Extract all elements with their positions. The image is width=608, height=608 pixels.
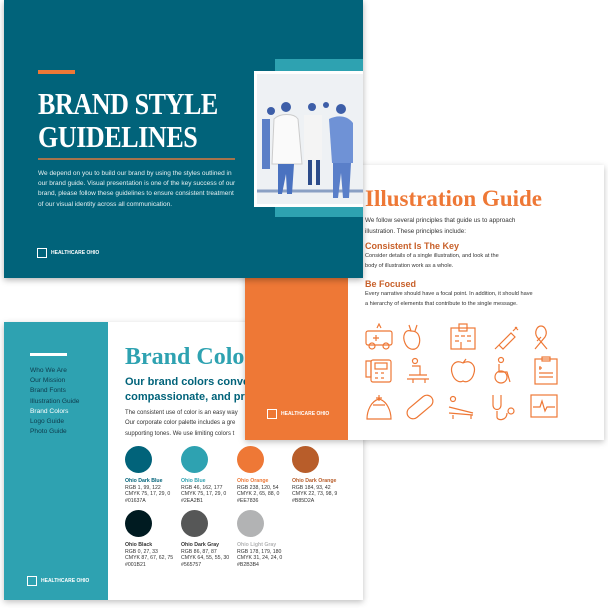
subheading [125, 376, 258, 403]
orange column [245, 165, 348, 440]
logo [267, 409, 330, 419]
swatch: dark gray: CMYK 64, 55, 55, 30 [181, 555, 229, 561]
nav menu: Logo Guide [30, 418, 64, 425]
title [38, 86, 218, 154]
swatch: blue: CMYK 75, 17, 29, 0 [181, 491, 226, 497]
section: focused: Be Focused [365, 279, 416, 289]
body text: Our corporate color palette includes a gre [125, 420, 235, 426]
section: consistent [365, 241, 499, 268]
swatch: dark orange: #B85D2A [292, 498, 314, 504]
icon grid [365, 323, 558, 420]
swatch: dark orange: RGB 184, 93, 42 [292, 485, 331, 491]
swatch: dark orange [292, 446, 337, 504]
nav menu: Brand Colors [30, 408, 68, 415]
logo: HEALTHCARE OHIO [41, 578, 89, 584]
swatch: orange: Ohio Orange [237, 478, 268, 484]
intro text [365, 217, 515, 234]
swatch: blue: RGB 46, 162, 177 [181, 485, 223, 491]
logo [37, 248, 100, 258]
row 3 [367, 395, 391, 419]
swatch: dark blue: RGB 1, 99, 122 [125, 485, 161, 491]
section: focused: Every narrative should have a focal point. In addition, it should have [365, 291, 533, 297]
description: brand, please follow these guidelines to ensure consistent treatment [38, 190, 234, 197]
swatch: dark blue: CMYK 75, 17, 29, 0 [125, 491, 170, 497]
section: focused: a hierarchy of elements that contribute to the single message. [365, 300, 518, 306]
description: our brand guide. Visual presentation is one of the key success of our [38, 180, 235, 187]
intro text: illustration. These principles include: [365, 228, 466, 234]
description: We depend on you to build our brand by using the styles outlined in [38, 170, 232, 177]
heading: Brand Colors [125, 344, 264, 370]
logo: HEALTHCARE OHIO [281, 411, 329, 417]
swatch: blue: Ohio Blue [181, 478, 206, 484]
row 1 [366, 324, 392, 349]
swatch: dark blue: Ohio Dark Blue [125, 478, 162, 484]
nav menu: Brand Fonts [30, 387, 66, 394]
swatch: dark gray: Ohio Dark Gray [181, 542, 219, 548]
nav menu: Photo Guide [30, 428, 67, 435]
swatch: blue: #2EA2B1 [181, 498, 203, 504]
logo [27, 576, 90, 586]
swatch: dark blue [125, 446, 170, 504]
swatch: black: Ohio Black [125, 542, 152, 548]
swatch: dark gray: #565757 [181, 562, 201, 568]
title: GUIDELINES [38, 119, 197, 154]
swatch: dark gray: RGB 86, 87, 87 [181, 549, 217, 555]
description: of our visual identity across all communication. [38, 201, 172, 208]
nav menu: Illustration Guide [30, 398, 79, 405]
swatch: black: RGB 0, 27, 33 [125, 549, 158, 555]
divider [38, 158, 235, 160]
swatch: dark orange: Ohio Dark Orange [292, 478, 336, 484]
body text: supporting tones. We use limiting colors t [125, 431, 234, 437]
section: consistent: Consistent Is The Key [365, 241, 459, 251]
logo: HEALTHCARE OHIO [51, 250, 99, 256]
swatch: black [125, 510, 173, 568]
description [38, 170, 236, 208]
nav menu [30, 367, 80, 435]
row 2 [366, 360, 391, 382]
section: consistent: body of illustration work as a whole. [365, 262, 453, 268]
subheading: compassionate, and prog [125, 391, 258, 403]
orange accent bar [38, 70, 75, 74]
nav menu: Our Mission [30, 377, 65, 384]
swatch: light gray: #B2B3B4 [237, 562, 259, 568]
body text: The consistent use of color is an easy way [125, 410, 238, 416]
swatch: black: #001B21 [125, 562, 146, 568]
intro text: We follow several principles that guide us to approach [365, 217, 515, 224]
swatch: light gray: Ohio Light Gray [237, 542, 276, 548]
page: brand colors [4, 322, 363, 600]
photo [254, 71, 363, 207]
swatch: dark gray [181, 510, 229, 568]
swatch: light gray: CMYK 31, 24, 24, 0 [237, 555, 282, 561]
swatch: dark orange: CMYK 22, 73, 98, 9 [292, 491, 337, 497]
swatch: blue [181, 446, 226, 504]
heading: Illustration Guide [365, 186, 542, 211]
swatch: orange: RGB 238, 120, 54 [237, 485, 279, 491]
page: illustration guide [245, 165, 604, 440]
swatch: dark blue: #01637A [125, 498, 146, 504]
body text [125, 410, 238, 437]
swatch: light gray: RGB 178, 179, 180 [237, 549, 281, 555]
subheading: Our brand colors convey [125, 376, 255, 388]
swatch: orange: CMYK 2, 65, 88, 0 [237, 491, 279, 497]
swatch: light gray [237, 510, 282, 568]
title: BRAND STYLE [38, 86, 218, 121]
swatch: orange [237, 446, 280, 504]
sidebar [4, 322, 108, 600]
teal photo frame [275, 59, 363, 217]
nav menu: Who We Are [30, 367, 67, 374]
swatch: black: CMYK 87, 67, 62, 75 [125, 555, 173, 561]
page: cover [4, 0, 363, 278]
section: focused [365, 279, 533, 306]
section: consistent: Consider details of a single illustration, and look at the [365, 253, 499, 259]
swatch: orange: #EE7836 [237, 498, 258, 504]
